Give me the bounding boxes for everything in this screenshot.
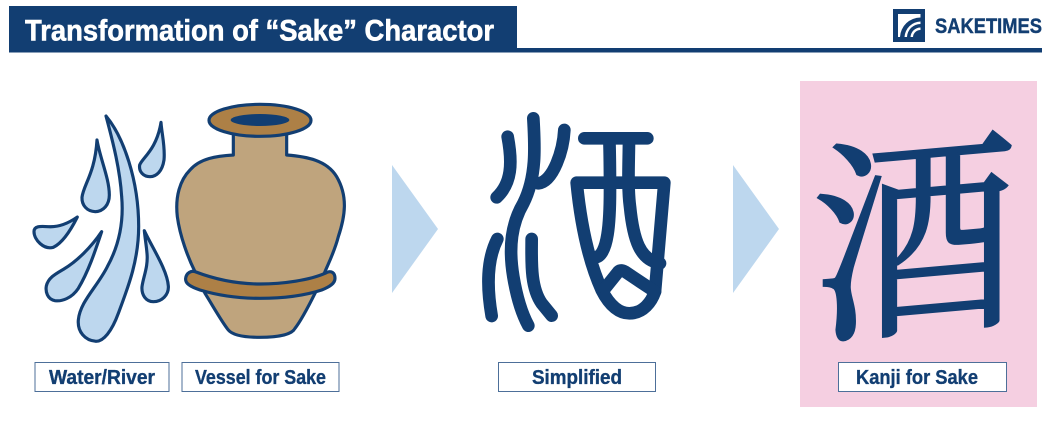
kanji character: 酒	[812, 116, 1017, 373]
label: Water/River	[35, 362, 169, 392]
label: Vessel for Sake	[182, 362, 339, 392]
arrow: second	[733, 165, 779, 293]
panel: kanji background	[800, 81, 1037, 407]
arrow: first	[392, 165, 438, 293]
icon: simplified character	[488, 118, 664, 326]
label: Kanji for Sake	[838, 362, 1006, 392]
logo: SAKETIMES: SAKETIMES	[935, 15, 1042, 38]
label: Water/River: Water/River	[49, 367, 155, 389]
icon: water drops	[34, 116, 168, 341]
label: Vessel for Sake: Vessel for Sake	[195, 367, 326, 389]
title: Transformation of “Sake” Charactor	[25, 14, 494, 48]
label: Kanji for Sake: Kanji for Sake	[856, 367, 978, 389]
logo: SAKETIMES	[893, 9, 1042, 42]
label: Simplified: Simplified	[532, 367, 622, 389]
icon: sake vessel	[177, 104, 344, 337]
header: title bar	[9, 6, 1042, 52]
label: Simplified	[498, 362, 656, 392]
